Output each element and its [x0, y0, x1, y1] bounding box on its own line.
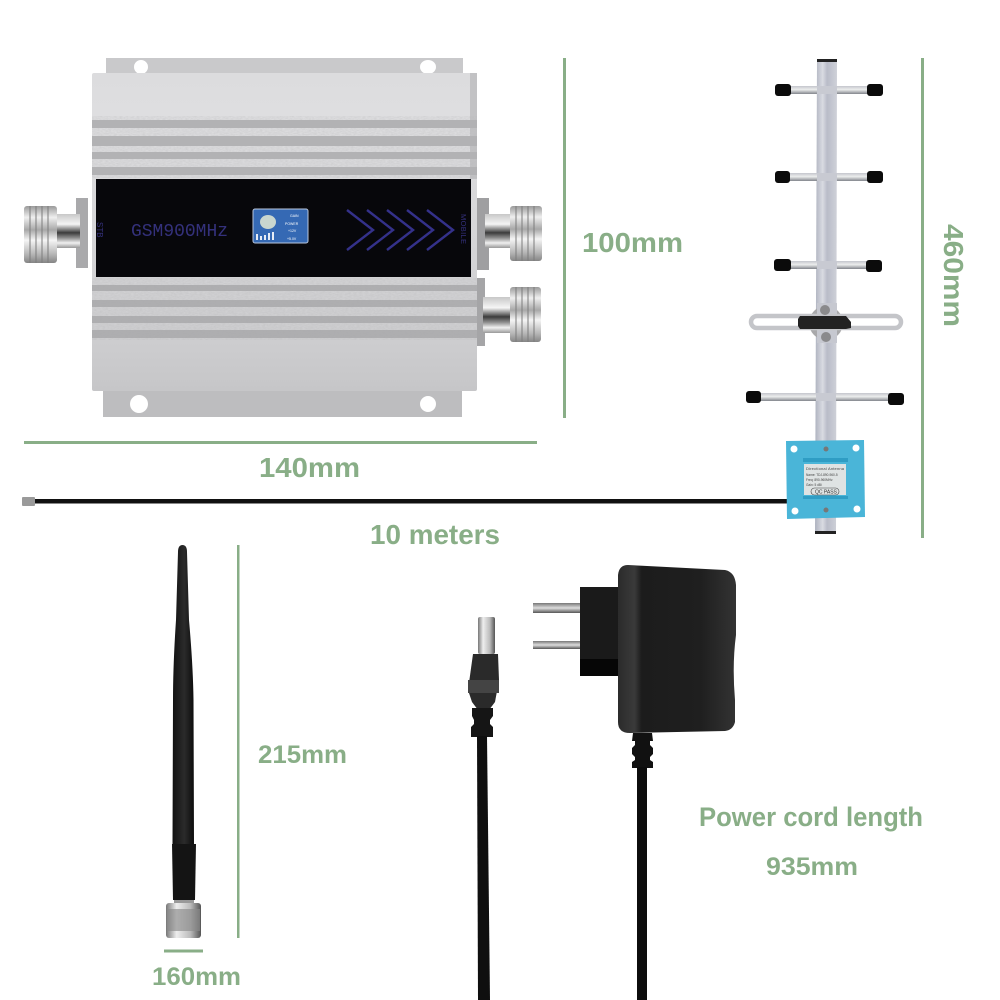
antenna boom [815, 60, 837, 534]
LCD status badge: +12V [288, 229, 297, 233]
STB port text: STB [95, 222, 104, 238]
element 3 [774, 259, 882, 272]
cord strain relief [632, 733, 653, 768]
label: 160mm: 160mm [152, 963, 241, 991]
right connector top (MOBILE) [477, 198, 542, 270]
label: 140mm: 140mm [259, 452, 360, 483]
product label: Directional Antenna [806, 466, 845, 471]
adapter body [618, 565, 736, 733]
product label: Gain: 5 dBi [806, 483, 822, 487]
cooling ribs, upper [92, 120, 477, 175]
top mounting flange [106, 58, 463, 76]
model text: GSM900MHz [131, 222, 228, 242]
yagi antenna [746, 59, 904, 534]
dimension line: whip antenna base width [164, 950, 203, 952]
plug base [580, 587, 623, 676]
label: 215mm: 215mm [258, 741, 347, 769]
dimension line: whip antenna height [237, 545, 240, 938]
coaxial cable, 10 meters [22, 497, 789, 506]
DC barrel plug and cord [468, 617, 499, 1000]
dimension line: repeater height [563, 58, 566, 418]
MOBILE port text: MOBILE [459, 214, 468, 244]
element 2 [775, 171, 883, 183]
element 5 [746, 391, 904, 405]
LCD status badge: GAIN [290, 214, 299, 218]
LCD status badge: POWER [285, 222, 299, 226]
product label: Freq: 890-960MHz [806, 478, 833, 482]
label: 10 meters: 10 meters [370, 519, 500, 550]
direction chevrons [347, 210, 453, 250]
bottom mounting flange [103, 388, 462, 417]
black display panel [96, 179, 471, 277]
N-type connector [166, 900, 201, 938]
product label: Name: TDJ-890-960-5 [806, 473, 838, 477]
whip antenna [166, 545, 201, 938]
label: 935mm: 935mm [766, 853, 858, 881]
element 1 [775, 84, 883, 96]
cord [637, 767, 647, 1000]
right connector bottom [477, 278, 541, 346]
label: 100mm: 100mm [582, 227, 683, 258]
plug prongs [533, 603, 581, 649]
plug body [468, 654, 499, 710]
LCD status badge: +5.0V [287, 237, 297, 241]
power adapter [533, 565, 736, 1000]
label: 460mm: 460mm [938, 224, 969, 327]
label: power cord length: Power cord length [699, 802, 923, 832]
cord [477, 736, 490, 1000]
barrel tip [478, 617, 495, 654]
antenna sleeve [172, 844, 196, 900]
dimension line: repeater width [24, 441, 537, 444]
left connector (STB) [24, 198, 88, 268]
folded dipole with clamp [751, 303, 901, 343]
aluminium body [92, 73, 477, 391]
brushed metal grain [92, 116, 477, 340]
antenna blade [172, 545, 194, 845]
repeater unit [24, 58, 542, 417]
LCD status badge [253, 209, 308, 243]
product label: QC PASS [815, 490, 838, 496]
cooling ribs, lower [92, 285, 477, 338]
product label [804, 464, 846, 496]
dimension line: yagi antenna length [921, 58, 924, 538]
blue mounting plate [786, 440, 865, 519]
plug strain relief [471, 708, 493, 737]
